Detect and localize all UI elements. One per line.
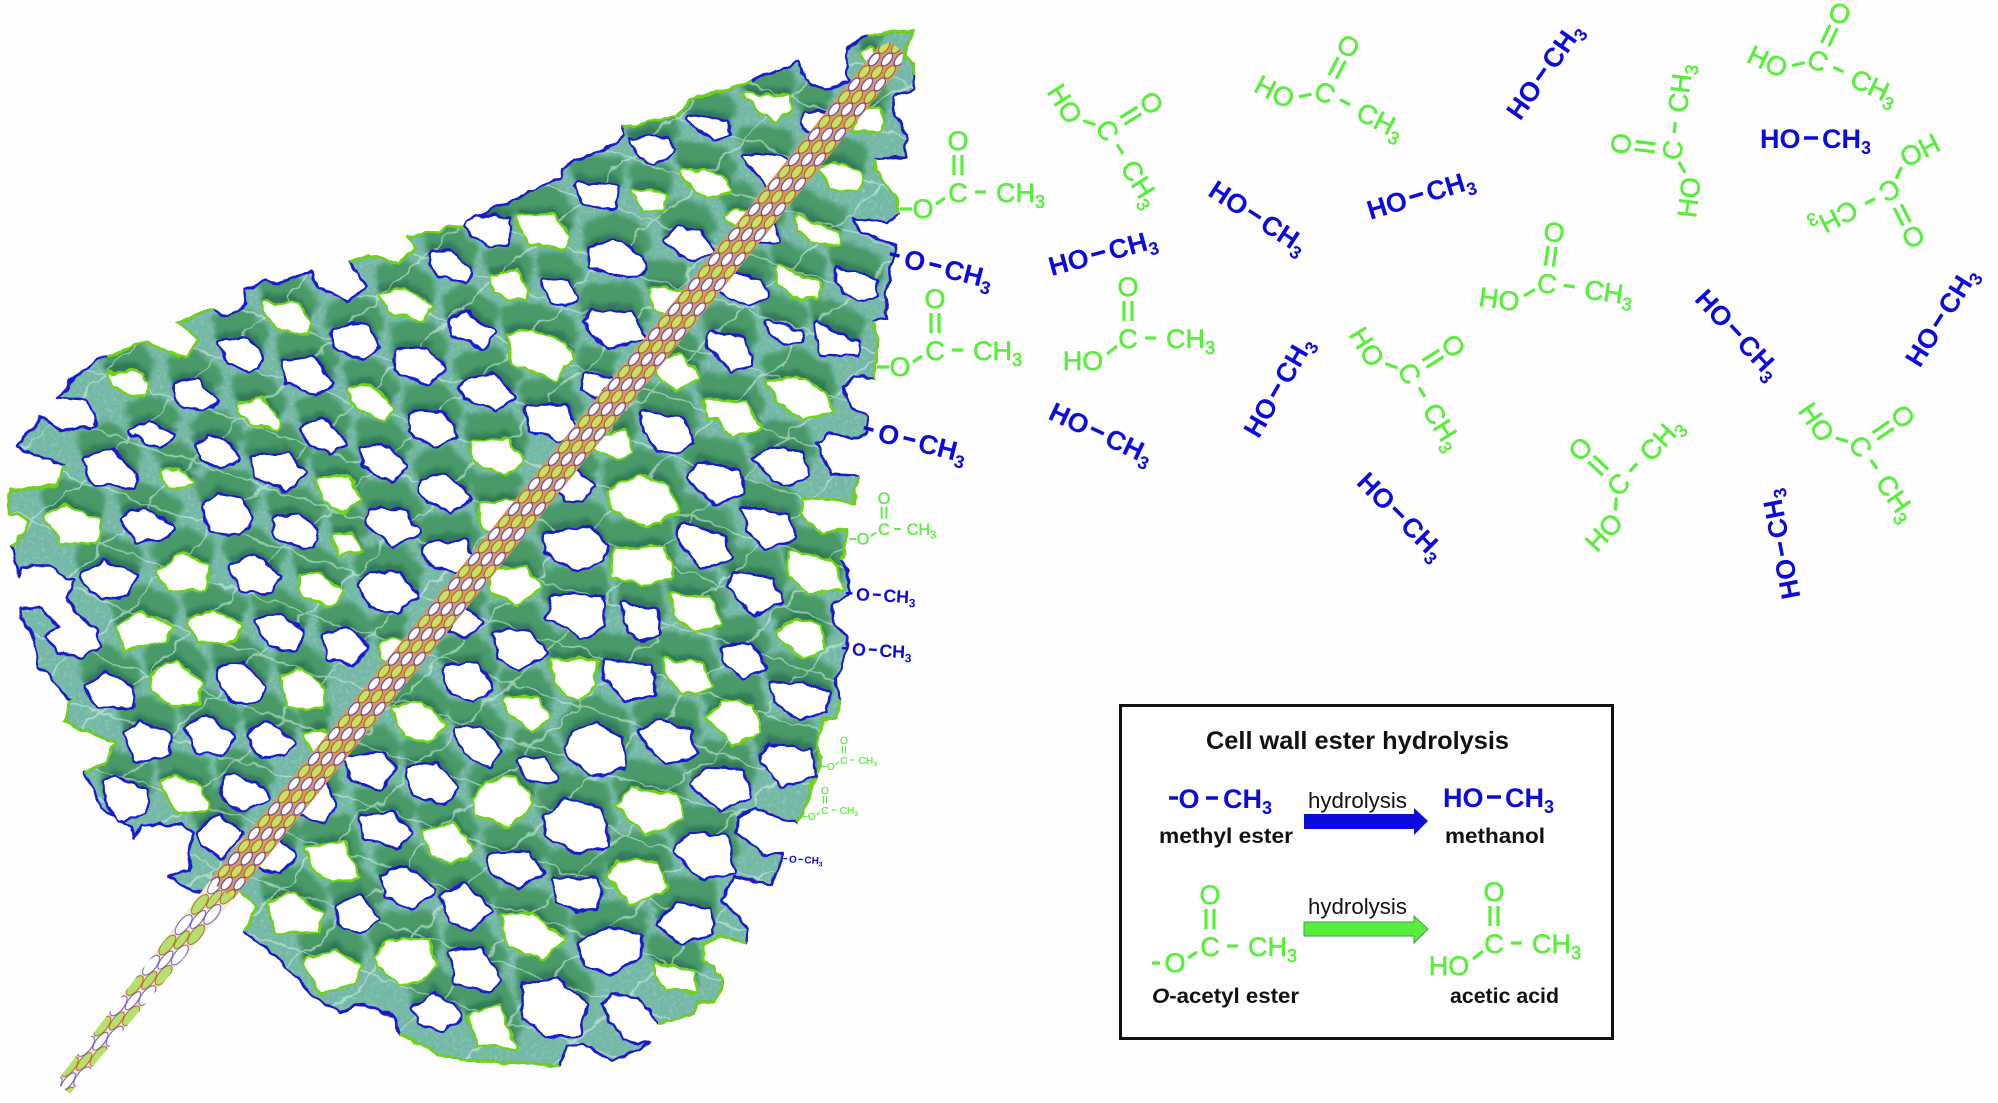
attached O-acetyl ester 1: 3 (1035, 192, 1045, 212)
acetic acid 1: HO (1041, 79, 1088, 129)
acetic acid 6: 3 (1205, 338, 1215, 358)
acetic acid label: acetic acid (1450, 985, 1559, 1008)
acetic acid 1: C (1089, 114, 1125, 147)
acetic acid 10: CH (1870, 469, 1917, 518)
attached O-acetyl ester 2: O (889, 352, 911, 382)
midrib of leaf (51, 38, 909, 1097)
attached methyl ester 3 (845, 584, 917, 610)
attached O-acetyl ester 3: CH (907, 521, 930, 539)
attached methyl ester 4: 3 (904, 651, 912, 665)
methanol 1: CH (1105, 227, 1151, 266)
methanol 7: 3 (1134, 452, 1152, 474)
methanol 7: HO (1044, 397, 1094, 441)
acetic acid 6: CH (1166, 324, 1205, 354)
green arrow (1304, 916, 1428, 943)
acetic acid formula: O (1483, 877, 1505, 907)
methanol 5: HO (1760, 124, 1800, 154)
methanol 10: CH (1395, 510, 1444, 559)
acetic acid formula: C (1484, 929, 1504, 959)
acetic acid 3: CH (1846, 63, 1894, 107)
attached methyl ester 3: O (856, 584, 871, 605)
methanol 3: HO (1363, 185, 1411, 226)
acetic acid 10: O (1884, 400, 1921, 434)
acetic acid formula: HO (1429, 951, 1469, 981)
acetic acid 8: CH (1417, 398, 1463, 447)
attached methyl ester 4: O (852, 639, 867, 660)
acetic acid 2: HO (1250, 70, 1299, 115)
attached methyl ester 1: O (901, 244, 929, 278)
acetic acid 9: HO (1579, 508, 1629, 558)
acetic acid 8 (1343, 283, 1512, 467)
methanol 2: HO (1203, 175, 1254, 222)
acetic acid 1 (1041, 40, 1210, 224)
attached methyl ester 1: 3 (978, 277, 993, 299)
acetic acid 5: 3 (1803, 208, 1821, 231)
methanol 4: HO (1500, 75, 1548, 125)
molecules attached to leaf (783, 126, 1045, 868)
methanol 10: 3 (1420, 548, 1441, 569)
attached methyl ester 5 (783, 854, 823, 868)
acetic acid 9: C (1601, 467, 1636, 502)
acetic acid 8: 3 (1434, 438, 1456, 457)
methanol formula (1443, 783, 1554, 817)
attached methyl ester 5: O (789, 855, 797, 866)
attached O-acetyl ester 3: C (878, 521, 890, 539)
legend panel: cell wall ester hydrolysis (1120, 706, 1612, 1038)
acetic acid 4: CH (1663, 72, 1697, 114)
methyl ester formula (1169, 784, 1272, 818)
methanol 6: CH (1269, 340, 1314, 389)
acetic acid 6: HO (1063, 346, 1103, 376)
attached O-acetyl ester 4: CH (858, 756, 873, 767)
methanol 6: HO (1238, 392, 1284, 442)
released methanol molecules (1043, 17, 1987, 602)
attached methyl ester 4: CH (879, 641, 906, 662)
acetic acid 5: C (1874, 172, 1905, 208)
methanol 4: 3 (1570, 25, 1592, 45)
leaf: cell wall lattice (0, 0, 930, 1080)
acetic acid 5: CH (1814, 194, 1862, 238)
methanol 11: CH (1758, 497, 1795, 541)
acetic acid 7 (1477, 209, 1642, 333)
acetic acid 1: O (1133, 86, 1170, 120)
methanol 7 (1043, 397, 1158, 474)
acetic acid 4: HO (1672, 176, 1707, 219)
attached O-acetyl ester 1 (900, 126, 1045, 224)
methyl ester formula: O (1178, 784, 1200, 814)
acetic acid 2: 3 (1385, 127, 1403, 149)
attached O-acetyl ester 1: O (912, 194, 934, 224)
methanol 5 (1760, 124, 1871, 158)
methanol 8 (1686, 283, 1787, 388)
leaf blade base (8, 31, 914, 1065)
methanol formula: HO (1443, 783, 1484, 813)
methanol 11 (1756, 486, 1810, 602)
methanol 3: CH (1423, 167, 1469, 208)
acetic acid 10: 3 (1889, 509, 1911, 529)
acetic acid 5 (1795, 128, 1978, 289)
methyl ester formula: 3 (1262, 798, 1272, 818)
attached methyl ester 2: O (875, 418, 903, 452)
methanol 2: CH (1255, 209, 1304, 255)
methanol 10: HO (1351, 467, 1401, 516)
methanol 7: CH (1101, 423, 1149, 467)
methanol 4 (1500, 17, 1592, 127)
acetic acid 10: C (1842, 430, 1878, 463)
acetic acid formula: CH (1532, 929, 1571, 959)
attached O-acetyl ester 4: O (840, 736, 848, 747)
acetic acid 2: CH (1352, 97, 1400, 141)
attached O-acetyl ester 4: O (827, 762, 835, 773)
attached O-acetyl ester 3: O (857, 531, 869, 549)
attached O-acetyl ester 5: 3 (854, 811, 858, 818)
acetic acid 9: 3 (1671, 420, 1692, 441)
attached O-acetyl ester 4 (822, 736, 877, 773)
attached methyl ester 1: CH (941, 254, 986, 292)
O-acetyl ester formula: O (1199, 880, 1221, 910)
attached methyl ester 2: 3 (952, 451, 967, 473)
methanol 9: HO (1899, 322, 1946, 372)
methanol formula: 3 (1544, 797, 1554, 817)
legend title: Cell wall ester hydrolysis (1206, 727, 1509, 755)
methanol 2 (1201, 175, 1313, 264)
methanol 9: CH (1932, 270, 1978, 319)
O-acetyl ester formula (1152, 880, 1297, 978)
attached O-acetyl ester 2 (877, 284, 1022, 382)
attached O-acetyl ester 5: O (821, 786, 829, 797)
acetic acid 4: 3 (1681, 64, 1702, 76)
methanol 2: 3 (1286, 242, 1305, 264)
attached O-acetyl ester 1: C (948, 178, 968, 208)
O-acetyl ester label: O-acetyl ester (1152, 985, 1299, 1008)
O-acetyl ester formula: O (1164, 948, 1186, 978)
methanol 8: HO (1689, 283, 1739, 334)
hydrolysis label, acetyl row: hydrolysis (1308, 894, 1407, 919)
attached O-acetyl ester 1: O (947, 126, 969, 156)
attached O-acetyl ester 5: O (808, 812, 816, 823)
attached O-acetyl ester 3: 3 (930, 530, 936, 542)
acetic acid 7: C (1535, 268, 1559, 300)
methanol 8: 3 (1755, 367, 1777, 388)
acetic acid 3: HO (1743, 40, 1792, 84)
acetic acid 2 (1250, 4, 1432, 165)
attached O-acetyl ester 4: 3 (873, 761, 877, 768)
attached O-acetyl ester 4: C (840, 756, 848, 767)
methanol formula: CH (1505, 783, 1544, 813)
attached methyl ester 3: CH (883, 586, 910, 607)
methanol 8: CH (1731, 329, 1780, 378)
methanol 11: HO (1769, 556, 1806, 602)
attached methyl ester 2 (859, 414, 970, 473)
acetic acid 7: HO (1477, 282, 1521, 317)
acetic acid 5: O (1897, 218, 1929, 255)
acetic acid 6: O (1117, 272, 1139, 302)
acetic acid 8: O (1435, 329, 1472, 363)
methanol 1: HO (1045, 242, 1092, 282)
acetic acid 4: O (1605, 132, 1638, 156)
O-acetyl ester formula: CH (1248, 932, 1287, 962)
methanol 4: CH (1536, 25, 1583, 74)
methanol 9: 3 (1965, 269, 1987, 288)
acetic acid 8: HO (1343, 322, 1390, 372)
attached O-acetyl ester 2: 3 (1012, 350, 1022, 370)
acetic acid 2: C (1309, 75, 1340, 111)
methanol 6: 3 (1300, 338, 1323, 357)
acetic acid 2: O (1332, 28, 1364, 65)
acetic acid 6 (1063, 272, 1215, 376)
attached O-acetyl ester 1: CH (996, 178, 1035, 208)
methyl ester formula: CH (1223, 784, 1262, 814)
leaf outline (8, 31, 914, 1065)
methanol 1 (1045, 224, 1161, 286)
acetic acid 1: CH (1115, 155, 1161, 204)
acetic acid 3 (1743, 0, 1925, 131)
leaf outline: green edge segments (8, 31, 914, 1065)
acetic acid 3: 3 (1879, 93, 1897, 115)
attached O-acetyl ester 5 (803, 786, 858, 823)
acetic acid 4 (1599, 56, 1720, 219)
leaf shading and surface texture (0, 0, 930, 1080)
acetic acid 7: O (1542, 216, 1567, 249)
methanol 10 (1348, 467, 1451, 569)
O-acetyl ester formula: 3 (1287, 946, 1297, 966)
attached methyl ester 2: CH (915, 428, 960, 466)
methanol label: methanol (1445, 825, 1545, 848)
attached methyl ester 1 (885, 240, 996, 299)
acetic acid 10: HO (1792, 397, 1840, 448)
white interior of holes (48, 50, 879, 1048)
methanol 1: 3 (1146, 238, 1161, 260)
acetic acid 6: C (1118, 324, 1138, 354)
legend frame (1120, 706, 1612, 1038)
methanol 9 (1899, 262, 1987, 374)
acetic acid 3: C (1802, 43, 1833, 79)
acetic acid 4: C (1657, 139, 1689, 162)
attached methyl ester 5: CH (804, 855, 819, 867)
hydrolysis label, methyl row: hydrolysis (1308, 788, 1407, 813)
attached O-acetyl ester 5: C (821, 806, 829, 817)
methanol 11: 3 (1770, 486, 1791, 500)
attached O-acetyl ester 3: O (878, 490, 890, 508)
acetic acid 9: CH (1634, 418, 1682, 467)
methanol 3: 3 (1464, 178, 1479, 200)
blue arrow (1304, 808, 1428, 835)
acetic acid 5: HO (1895, 128, 1945, 173)
attached methyl ester 5: 3 (818, 861, 823, 868)
acetic acid formula (1429, 877, 1581, 981)
acetic acid 1: 3 (1132, 195, 1154, 214)
attached methyl ester 4 (841, 639, 913, 665)
attached O-acetyl ester 2: CH (973, 336, 1012, 366)
methyl ester label: methyl ester (1159, 825, 1293, 848)
attached O-acetyl ester 5: CH (839, 806, 854, 817)
acetic acid formula: 3 (1571, 943, 1581, 963)
cell wall holes: green (O-acetyl ester) rim (48, 50, 879, 1048)
acetic acid 10 (1792, 355, 1965, 539)
acetic acid 9: O (1563, 431, 1599, 467)
attached methyl ester 3: 3 (908, 596, 916, 610)
methanol 6 (1238, 331, 1323, 444)
methanol 5: CH (1822, 124, 1861, 154)
attached O-acetyl ester 2: O (924, 284, 946, 314)
methanol 3 (1363, 165, 1479, 229)
attached O-acetyl ester 3 (849, 490, 936, 549)
acetic acid 7: 3 (1620, 294, 1633, 315)
acetic acid 7: CH (1582, 274, 1625, 310)
attached O-acetyl ester 2: C (925, 336, 945, 366)
O-acetyl ester formula: C (1200, 932, 1220, 962)
acetic acid 8: C (1391, 357, 1427, 390)
acetic acid 9 (1525, 375, 1705, 558)
released acetic acid molecules (1041, 0, 1978, 558)
methanol 5: 3 (1861, 138, 1871, 158)
cell wall holes: blue (methyl ester) rim (83, 113, 875, 1033)
